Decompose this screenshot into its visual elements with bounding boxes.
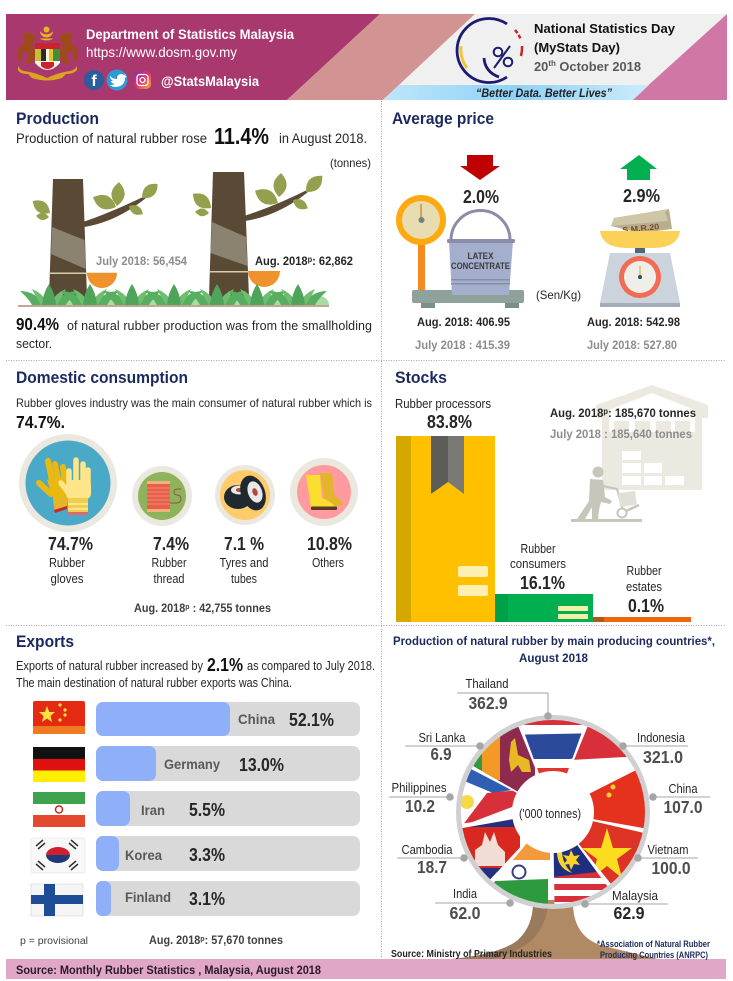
row: China: [33, 701, 360, 736]
label: China: [649, 781, 710, 817]
label: Vietnam: 100.0: [652, 858, 691, 878]
consumption total: Aug. 2018: [134, 603, 188, 615]
label: rubber estates: estates: [626, 579, 662, 594]
panel: producing countries: [389, 634, 715, 960]
label: Philippines: [389, 780, 454, 816]
header banner: [6, 14, 727, 100]
label: Sri Lanka: 6.9: [430, 744, 452, 764]
row: Korea: [31, 836, 360, 873]
footnote: ANRPC: *Association of Natural Rubber: [597, 939, 710, 949]
label: rubber consumers: Rubber: [520, 541, 556, 556]
stat: rubber thread: thread: [154, 571, 184, 586]
slogan: “Better Data. Better Lives”: [476, 86, 612, 100]
footnote: ANRPC: [597, 939, 710, 960]
exports sentence: Exports of natural rubber increased by: [16, 659, 204, 673]
icon: rubber thread: [132, 466, 192, 526]
source: ministry: Source: Ministry of Primary Industries: [391, 949, 552, 960]
exports growth: 2.1%: [207, 654, 243, 675]
stat: others: [307, 533, 352, 570]
row: Germany: 13.0%: [239, 754, 284, 775]
bar: rubber processors: [396, 436, 495, 622]
production growth rate: 11.4%: [214, 123, 269, 149]
footer bar: [6, 959, 726, 979]
latex July price: July 2018 : 415.39: [415, 338, 510, 352]
consumption total: : 42,755 tonnes: [190, 603, 271, 615]
label: Malaysia: 62.9: [614, 903, 645, 923]
wedge: Sri Lanka: [473, 726, 535, 792]
stat: tyres and tubes: Tyres and: [220, 555, 268, 570]
icon: platform scale with latex bucket: [396, 195, 524, 308]
event title: National Statistics Day: [534, 21, 676, 36]
wedge: Thailand: [524, 720, 582, 774]
icon: tree trunk: [442, 900, 663, 960]
bucket label: LATEX: [468, 251, 494, 261]
panel: domestic consumption: [16, 368, 372, 615]
label: India: [435, 886, 514, 923]
label: Indonesia: Indonesia: [637, 730, 686, 745]
unit label: (tonnes): [330, 156, 371, 170]
August production value: : 62,862: [312, 254, 353, 268]
row: Finland: Finland: [125, 890, 171, 905]
provisional note: p = provisional: [20, 935, 88, 947]
stat: tyres and tubes: tubes: [231, 571, 257, 586]
icon: worker with trolley: [571, 466, 642, 522]
label: rubber consumers: consumers: [510, 556, 566, 571]
flag: Iran: [33, 792, 85, 827]
header band: purple: [6, 14, 380, 100]
bar: rubber estates: [593, 617, 691, 622]
stat: rubber thread: [152, 533, 189, 586]
heading: stocks: Stocks: [395, 368, 447, 387]
row: Finland: 3.1%: [189, 888, 225, 909]
event date: 20: [534, 59, 548, 74]
flag wheel: [456, 715, 650, 909]
label: Sri Lanka: Sri Lanka: [418, 730, 466, 745]
flag: Finland: [31, 884, 83, 916]
stat: rubber gloves: gloves: [50, 571, 84, 586]
exports total: p: [200, 934, 205, 943]
icon: national crest: [17, 26, 78, 80]
slogan strip: [384, 85, 649, 100]
event date: October 2018: [556, 59, 641, 74]
wedge: Philippines: [461, 769, 517, 824]
arrow: latex price down: [460, 155, 500, 180]
stat: rubber gloves: Rubber: [49, 555, 86, 570]
panel: exports: [16, 632, 375, 947]
stat: rubber gloves: [48, 533, 93, 586]
consumption total: p: [185, 602, 190, 611]
label: Vietnam: Vietnam: [648, 842, 688, 857]
icon: rubber gloves: [19, 434, 117, 532]
icon: facebook: f: [91, 73, 97, 90]
icon: rubber tree July: [29, 179, 161, 297]
header website: https://www.dosm.gov.my: [86, 44, 237, 60]
footnote: ANRPC: Producing Countries (ANRPC): [600, 950, 708, 960]
label: Malaysia: [581, 888, 668, 923]
August production value: Aug. 2018: [255, 254, 312, 268]
header band: right corner: [632, 14, 727, 100]
label: rubber estates: [626, 563, 662, 594]
icon: warehouse: [596, 385, 708, 490]
icon: twitter: [106, 70, 128, 90]
label: Philippines: Philippines: [392, 780, 447, 795]
label: Cambodia: 18.7: [417, 857, 447, 877]
label: Thailand: Thailand: [466, 676, 508, 691]
chart heading: Production of natural rubber by main producing countries*,: [393, 634, 715, 648]
wheel rim: [458, 718, 648, 906]
icon: kitchen scale with SMR20 block: [600, 209, 680, 307]
flag: Korea: [31, 838, 85, 873]
production sentence: Production of natural rubber rose: [16, 130, 207, 146]
header band: pink diagonal: [287, 14, 475, 100]
value: rubber processors: 83.8%: [427, 411, 472, 432]
SMR20 July price: July 2018: 527.80: [587, 338, 677, 352]
wedge: Malaysia: [554, 845, 608, 904]
stat: tyres and tubes: 7.1 %: [224, 533, 264, 554]
label: Cambodia: [397, 842, 468, 877]
event date: th: [548, 59, 556, 68]
stat: rubber thread: 7.4%: [153, 533, 189, 554]
unit label: sen per kg: (Sen/Kg): [536, 288, 581, 302]
label: rubber consumers: [510, 541, 566, 571]
flag: China: [33, 701, 85, 734]
label: rubber processors: Rubber processors: [395, 397, 491, 411]
stat: others: Others: [312, 555, 344, 570]
stocks August total: Aug. 2018: [550, 406, 607, 420]
July production value: July 2018: 56,454: [96, 254, 187, 268]
smallholding sentence: of natural rubber production was from the smallholding: [67, 319, 372, 333]
stocks July total: July 2018 : 185,640 tonnes: [550, 427, 692, 441]
header band: light panel: [383, 14, 727, 100]
row: Germany: [33, 746, 360, 782]
icon: rubber tree August: [189, 171, 327, 297]
stat: others: 10.8%: [307, 533, 352, 554]
icon: rubber boots: [290, 458, 358, 526]
smallholding sentence end: sector.: [16, 337, 52, 351]
consumption share: 74.7%.: [16, 412, 65, 432]
panel: average price: [392, 109, 680, 352]
heading: domestic consumption: Domestic consumption: [16, 368, 188, 387]
value: rubber consumers: 16.1%: [520, 572, 565, 593]
label: Philippines: 10.2: [405, 796, 435, 816]
arrow: SMR20 price up: [620, 155, 657, 180]
icon: facebook: [84, 70, 104, 90]
icon: kitchen scale with SMR20 block: S.M.R.20: [622, 222, 660, 235]
bar: rubber consumers: [495, 594, 593, 622]
chart heading line 2: August 2018: [519, 651, 588, 665]
icon: tyres and tubes: [215, 465, 275, 525]
SMR20 August price: Aug. 2018: 542.98: [587, 315, 680, 329]
icon: MyStats Day logo: [457, 19, 522, 83]
smallholding share: 90.4%: [16, 314, 59, 334]
label: India: 62.0: [450, 903, 481, 923]
row: Iran: 5.5%: [189, 799, 225, 820]
heading: production: Production: [16, 109, 99, 128]
row: China: 52.1%: [289, 709, 334, 730]
wedge: India: [494, 843, 550, 904]
exports main destination: The main destination of natural rubber exports was China.: [16, 676, 292, 690]
row: Korea: 3.3%: [189, 844, 225, 865]
heading: exports: Exports: [16, 632, 74, 651]
label: Indonesia: 321.0: [643, 747, 683, 767]
stocks August total: p: [603, 407, 608, 416]
label: Malaysia: Malaysia: [612, 888, 659, 903]
exports total: Aug. 2018: [149, 935, 203, 947]
label: rubber estates: Rubber: [626, 563, 662, 578]
row: Finland: [31, 881, 360, 916]
footer source: Source: Monthly Rubber Statistics , Malaysia, August 2018: [16, 963, 321, 977]
row: Iran: Iran: [141, 803, 165, 818]
label: China: China: [668, 781, 698, 796]
wedge: Indonesia: [574, 726, 627, 760]
consumption sentence: Rubber gloves industry was the main consumer of natural rubber which is: [16, 396, 372, 410]
wheel unit label: ('000 tonnes): [519, 807, 581, 821]
row: Iran: [33, 791, 360, 827]
bucket label line 2: CONCENTRATE: [451, 261, 510, 271]
label: India: India: [453, 886, 478, 901]
exports total: : 57,670 tonnes: [205, 935, 283, 947]
label: Thailand: 362.9: [468, 693, 508, 713]
stocks August total: : 185,670 tonnes: [608, 406, 696, 420]
production sentence end: in August 2018.: [279, 130, 367, 146]
latex price change: 2.0%: [463, 186, 499, 207]
value: rubber estates: 0.1%: [628, 595, 664, 616]
stat: rubber thread: Rubber: [152, 555, 187, 570]
August production value: p: [308, 255, 312, 264]
event subtitle: (MyStats Day): [534, 40, 620, 55]
icon: instagram: [134, 71, 151, 89]
latex August price: Aug. 2018: 406.95: [417, 315, 510, 329]
wedge: Cambodia: [462, 819, 520, 880]
label: Thailand: [457, 676, 552, 720]
exports sentence end: as compared to July 2018.: [247, 659, 375, 673]
header org name: Department of Statistics Malaysia: [86, 26, 294, 42]
label: China: 107.0: [664, 797, 703, 817]
wedge: China: [590, 770, 645, 828]
stat: rubber gloves: 74.7%: [48, 533, 93, 554]
panel: production: [16, 109, 372, 351]
wheel centre: [512, 771, 594, 853]
heading: average price: Average price: [392, 109, 494, 128]
wedge: Vietnam: [578, 821, 642, 884]
label: Vietnam: [634, 842, 698, 878]
row: Korea: Korea: [125, 848, 162, 863]
row: China: China: [238, 712, 275, 727]
panel: stocks: [395, 368, 708, 622]
flag: Germany: [33, 747, 85, 782]
icon: grass: [18, 284, 329, 307]
row: Germany: Germany: [164, 757, 220, 772]
stat: tyres and tubes: [220, 533, 268, 586]
social handle: @StatsMalaysia: [161, 74, 259, 89]
label: Sri Lanka: [405, 730, 484, 764]
label: Cambodia: Cambodia: [402, 842, 453, 857]
SMR20 price change: 2.9%: [623, 185, 660, 206]
label: Indonesia: [619, 730, 688, 767]
